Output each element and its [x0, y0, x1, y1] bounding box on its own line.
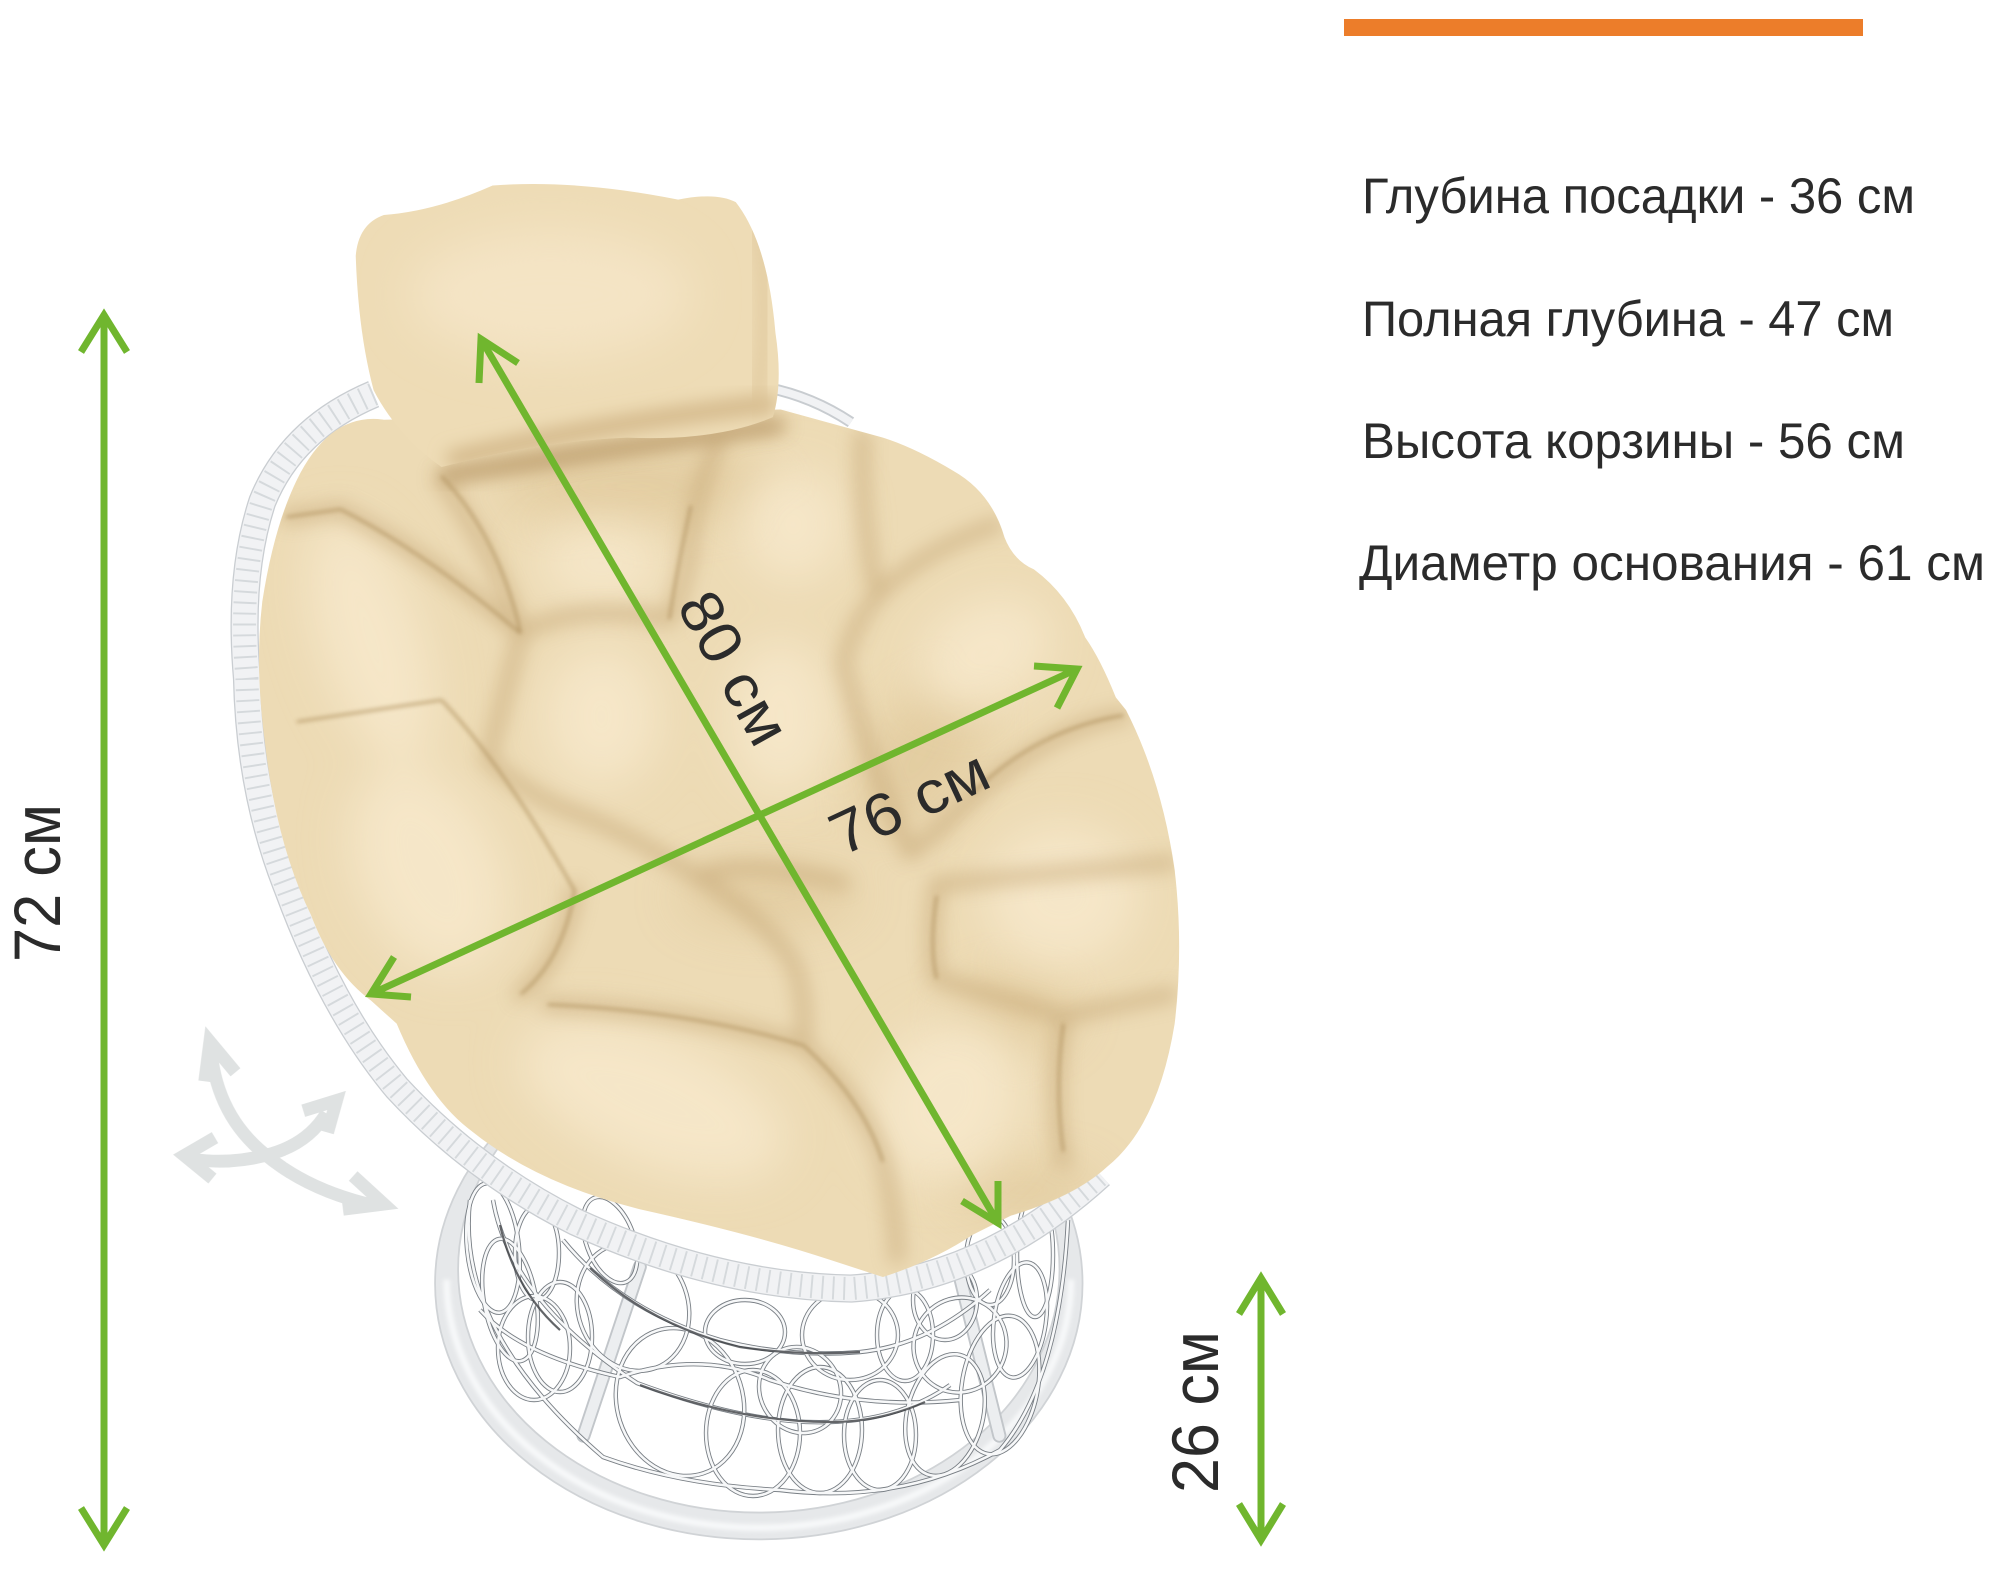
- chair illustration: [184, 184, 1203, 1539]
- diagonal arrow 80 cm: [479, 339, 998, 1223]
- legs: [583, 1267, 999, 1436]
- headrest pillow: [356, 184, 781, 476]
- wicker rim: [245, 388, 1100, 1289]
- cushion broad tones: [499, 448, 1100, 1216]
- spec: base diameter: Диаметр основания - 61 см: [1359, 535, 1985, 591]
- cushion soft shadows: [287, 425, 1171, 1258]
- base tubular ring: [435, 1026, 1083, 1539]
- seat cushion: [243, 384, 1203, 1292]
- label 72 cm: 72 см: [0, 804, 74, 962]
- height arrow 72 cm: [81, 315, 127, 1545]
- diagonal arrow 76 cm: [371, 666, 1077, 997]
- cushion highlights: [283, 467, 1139, 1213]
- height arrow 26 cm: [1239, 1278, 1283, 1540]
- spec: seat depth: Глубина посадки - 36 см: [1362, 168, 1915, 224]
- specifications list: [1359, 168, 1985, 591]
- spec: full depth: Полная глубина - 47 см: [1362, 291, 1894, 347]
- rotation arrows icon: [184, 1042, 384, 1209]
- headrest shading: [409, 218, 775, 461]
- label 26 cm: 26 см: [1158, 1331, 1232, 1493]
- headrest fill: [356, 184, 779, 467]
- orange bar: [1344, 19, 1863, 36]
- spec: basket height: Высота корзины - 56 см: [1362, 413, 1905, 469]
- ring highlight: [447, 1280, 1071, 1528]
- label 76 cm: 76 см: [819, 737, 1000, 868]
- cushion base fill: [243, 384, 1203, 1292]
- headrest shadow: [441, 425, 781, 476]
- label 80 cm: 80 см: [665, 580, 803, 756]
- chair base: [435, 1026, 1083, 1539]
- woven wires: [460, 1181, 1068, 1496]
- cushion fold lines: [287, 476, 1123, 1162]
